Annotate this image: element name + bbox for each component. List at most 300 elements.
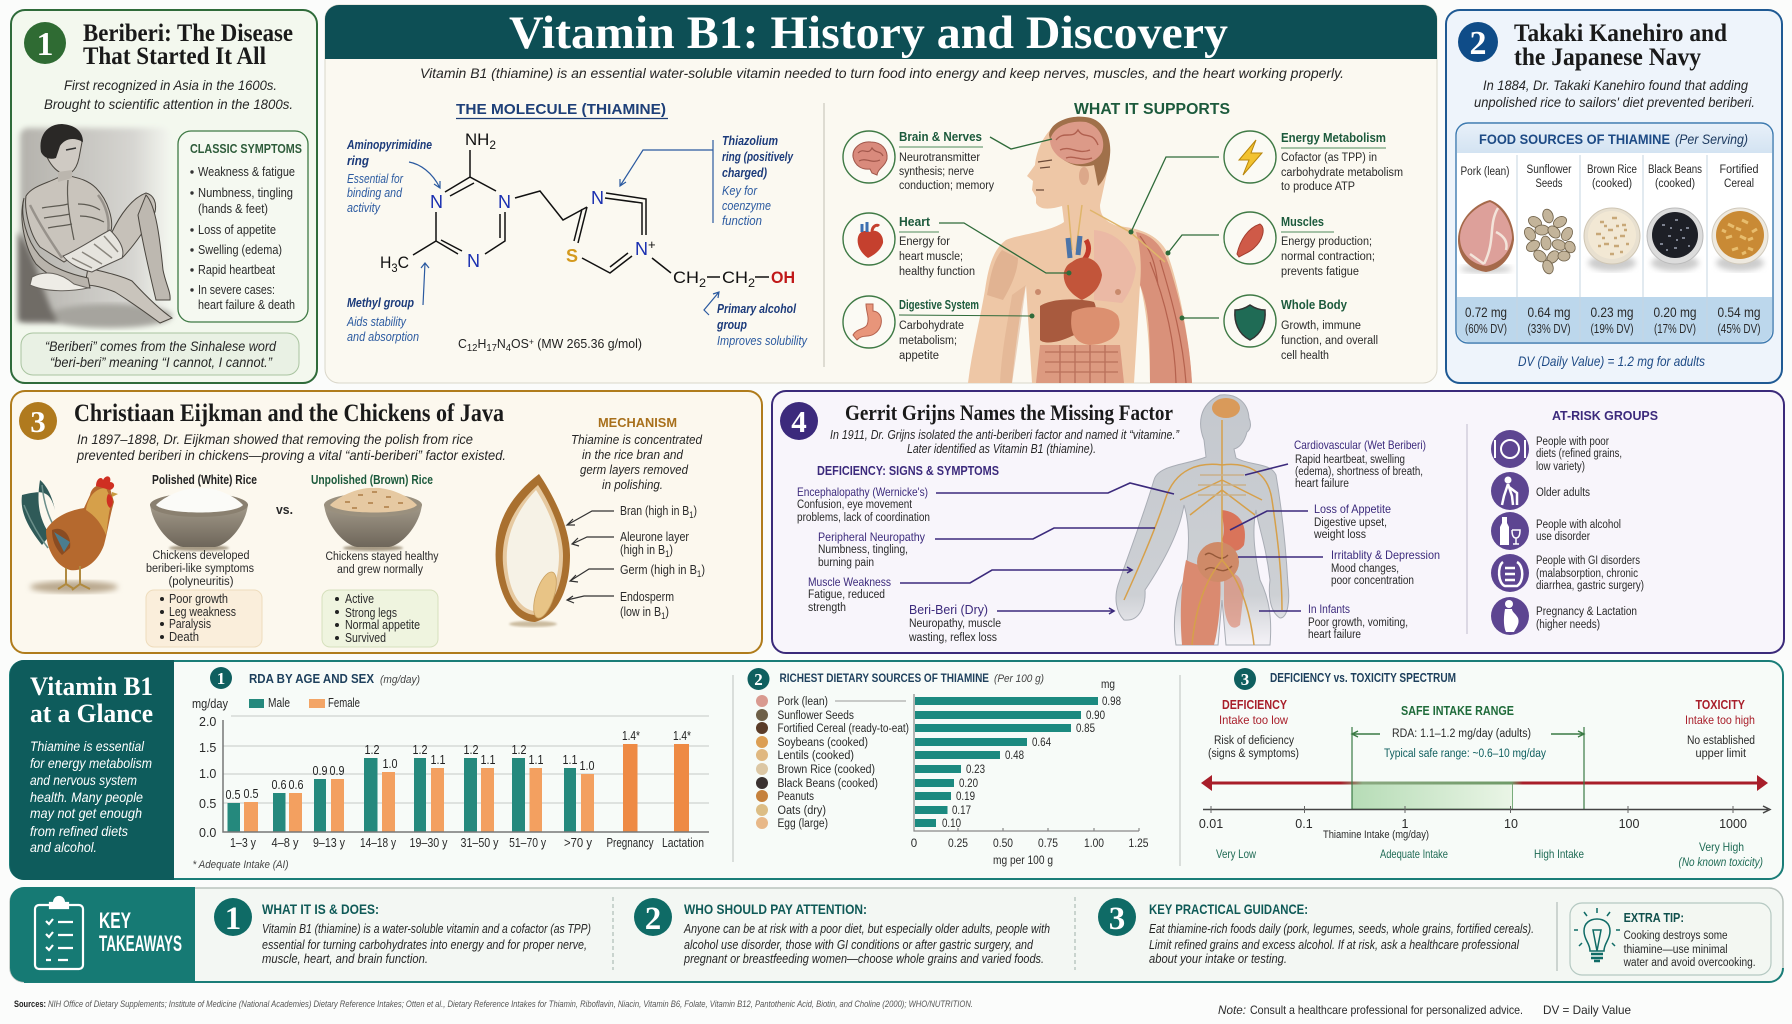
glance sidebar: may not get enough — [30, 805, 142, 821]
annotation: primary alcohol group: group — [716, 318, 747, 332]
footer note: DV = Daily Value — [1543, 1003, 1631, 1017]
number badge 3: 3 — [30, 404, 46, 439]
food sources table: FOOD SOURCES OF THIAMINE — [1479, 131, 1670, 147]
support: energy metabolism: carbohydrate metabolism — [1281, 167, 1403, 179]
chart: richest dietary sources: mg — [1101, 679, 1115, 691]
rice comparison: polished white rice: beriberi-like symptoms — [146, 563, 254, 575]
support: energy metabolism: Cofactor (as TPP) in — [1281, 152, 1377, 164]
icon: clipboard checklist — [35, 897, 83, 969]
at-risk: alcohol use disorder — [1491, 512, 1621, 550]
title banner — [325, 5, 1437, 59]
sources line: NIH Office of Dietary Supplements; Institute of Medicine (National Academies) Dietary Reference Intakes; Otten et al., Dietary Reference Intakes for Thiamin, Riboflavin, Niacin, Vitamin B6, Folate, Vitamin B12, Pantothenic Acid, Biotin, and Choline (2000); WHO/NUTRITION. — [48, 999, 973, 1010]
annotation: aminopyrimidine ring: Aminopyrimidine — [346, 138, 432, 152]
safe intake label: RDA: 1.1–1.2 mg/day (adults) — [1392, 728, 1531, 740]
classic symptoms box — [178, 131, 308, 322]
chart: rda by age and sex: 1.0 — [382, 756, 398, 771]
formula: 12 — [467, 343, 478, 354]
support: digestive system: Carbohydrate — [899, 320, 964, 332]
chart: rda by age and sex: 19–30 y — [410, 836, 448, 850]
symptom: wet beriberi: Cardiovascular (Wet Beriberi) — [1294, 438, 1426, 452]
chart: richest dietary sources: 0.19 — [956, 791, 975, 803]
chart: rda by age and sex: RDA BY AGE AND SEX — [249, 672, 375, 686]
chart: deficiency vs toxicity spectrum: 10 — [1504, 817, 1518, 831]
grain layer labels: Bran (high in B — [620, 504, 703, 518]
etymology callout: “Beriberi” comes from the Sinhalese word — [45, 339, 276, 354]
chart: rda by age and sex: 0.5 — [199, 797, 216, 811]
chart: deficiency vs toxicity spectrum: 100 — [1619, 817, 1639, 831]
takeaway 3 — [1098, 898, 1534, 966]
chart: rda by age and sex: 51–70 y — [509, 836, 547, 850]
chart: rda by age and sex: 1.1 — [430, 752, 446, 767]
at-risk: poor diets — [1491, 430, 1622, 473]
classic symptoms box: In severe cases: — [198, 283, 275, 297]
number badge 1: 1 — [36, 26, 54, 63]
symptom: wet beriberi: (edema), shortness of breath, — [1295, 466, 1423, 478]
at-risk: older adults: Older adults — [1536, 487, 1590, 499]
chemical structure: S — [566, 246, 578, 266]
at-risk: alcohol use disorder: People with alcohol — [1536, 519, 1621, 531]
rice comparison: unpolished brown rice: Chickens stayed healthy — [326, 551, 439, 563]
chart: rda by age and sex: (mg/day) — [380, 674, 420, 686]
chart: rda by age and sex: 1 — [217, 669, 225, 688]
chemical structure: N — [635, 239, 648, 259]
chart: richest dietary sources: (Per 100 g) — [994, 673, 1044, 685]
annotation: aminopyrimidine ring: ring — [347, 154, 369, 168]
chart: rda by age and sex: 1–3 y — [230, 836, 257, 850]
grain layer labels: 1 — [689, 510, 694, 520]
takeaway 2 — [634, 898, 1050, 966]
chemical structure: C — [398, 253, 409, 272]
support: heart: heart muscle; — [899, 251, 963, 263]
sources line: Sources: — [14, 999, 46, 1010]
symptom: dry beriberi: Neuropathy, muscle — [909, 618, 1001, 630]
chart: rda by age and sex: 1.4* — [673, 728, 691, 743]
rice comparison: unpolished brown rice: Unpolished (Brown) Rice — [311, 473, 433, 487]
food sources table: Sunflower — [1526, 164, 1572, 176]
what it supports heading: WHAT IT SUPPORTS — [1074, 101, 1230, 118]
food sources table: (Per Serving) — [1675, 131, 1748, 147]
symptom: irritability and depression — [1238, 548, 1440, 587]
takeaway 2: alcohol use disorder, those with GI conditions or after gastric surgery, and — [684, 938, 1034, 952]
symptom: irritability and depression: Irritablity & Depression — [1331, 548, 1440, 562]
symptom: muscle weakness: Fatigue, reduced — [808, 589, 885, 601]
chart: richest dietary sources: 0 — [911, 838, 917, 850]
heading: takaki: Takaki Kanehiro and — [1514, 20, 1727, 47]
food sources table: 0.23 mg — [1590, 304, 1634, 320]
support: muscles: Energy production; — [1281, 236, 1372, 248]
takeaway 2: pregnant or breastfeeding women—choose whole grains and varied foods. — [683, 952, 1044, 966]
illustration: human torso with organs — [968, 117, 1192, 383]
takeaway 1 — [214, 898, 591, 966]
chemical structure: 2 — [489, 138, 496, 152]
chart: rda by age and sex: 0.5 — [226, 787, 240, 802]
grain layer labels: ) — [669, 543, 673, 557]
classic symptoms box: Numbness, tingling — [198, 186, 293, 200]
toxicity label — [1685, 698, 1755, 760]
food sources table: (45% DV) — [1718, 322, 1760, 336]
annotation: aminopyrimidine ring: Essential for — [347, 172, 404, 186]
chart: deficiency vs toxicity spectrum: (No known toxicity) — [1678, 855, 1763, 869]
chemical structure: OH — [771, 268, 795, 287]
annotation: methyl group: and absorption — [347, 330, 419, 344]
rice comparison: unpolished brown rice: Survived — [345, 631, 386, 645]
formula: H — [477, 336, 486, 351]
grain layer labels: 1 — [665, 549, 669, 559]
classic symptoms box: Weakness & fatigue — [198, 165, 295, 179]
at-risk: gi disorders: (malabsorption, chronic — [1536, 568, 1638, 580]
panel 3: eijkman — [11, 391, 762, 653]
takeaway 2: WHO SHOULD PAY ATTENTION: — [684, 901, 867, 917]
food sources table: (33% DV) — [1528, 322, 1570, 336]
deficiency heading: DEFICIENCY: SIGNS & SYMPTOMS — [817, 463, 999, 478]
toxicity label: upper limit — [1696, 748, 1747, 760]
annotation: thiazolium ring — [620, 134, 794, 228]
symptom: muscle weakness: Muscle Weakness — [808, 575, 891, 589]
annotation: thiazolium ring: Thiazolium — [722, 134, 778, 148]
heading: grijns: Gerrit Grijns Names the Missing Factor — [845, 400, 1173, 425]
annotation: thiazolium ring: Key for — [722, 184, 758, 198]
intro text: prevented beriberi in chickens—proving a vital “anti-beriberi” factor existed. — [76, 447, 506, 463]
number badge 3 — [19, 402, 57, 440]
safe intake label — [1352, 704, 1584, 760]
deficiency label: DEFICIENCY — [1222, 698, 1288, 712]
support: whole body: Growth, immune — [1281, 320, 1361, 332]
panel 4: grijns — [772, 391, 1784, 653]
chart: rda by age and sex: 0.0 — [199, 826, 216, 840]
food sources table: (17% DV) — [1654, 322, 1696, 336]
annotation: thiazolium ring: ring (positively — [722, 150, 794, 164]
support: whole body: Whole Body — [1281, 297, 1348, 312]
footer note: Note: — [1218, 1003, 1246, 1017]
symptom: dry beriberi: wasting, reflex loss — [908, 632, 997, 644]
chart: richest dietary sources: 2 — [754, 670, 763, 689]
annotation: aminopyrimidine ring — [346, 138, 440, 215]
heading: beriberi: That Started It All — [83, 43, 266, 70]
vs label: vs. — [276, 502, 293, 517]
panel: header and molecule — [325, 5, 1437, 383]
chart: richest dietary sources: Fortified Cereal (ready-to-eat) — [778, 723, 909, 735]
annotation: aminopyrimidine ring: binding and — [347, 186, 403, 200]
chart: richest dietary sources: 0.64 — [1032, 737, 1052, 749]
takeaway 1: essential for turning carbohydrates into energy and for proper nerve, — [262, 938, 587, 952]
title banner: Vitamin B1: History and Discovery — [509, 7, 1229, 59]
symptom: in infants: In Infants — [1308, 602, 1350, 616]
intro text — [830, 428, 1180, 456]
number badge 1 — [24, 22, 66, 64]
glance sidebar: Vitamin B1 — [30, 672, 153, 701]
chemical structure: CH — [722, 268, 747, 287]
food sources table: 0.54 mg — [1718, 304, 1760, 320]
takeaway 1: Vitamin B1 (thiamine) is a water-soluble vitamin and a cofactor (as TPP) — [262, 922, 591, 936]
symptom: encephalopathy: problems, lack of coordination — [797, 512, 930, 524]
toxicity label: Intake too high — [1685, 713, 1755, 727]
rice comparison: polished white rice: Poor growth — [169, 592, 228, 606]
mechanism text: in the rice bran and — [582, 447, 684, 462]
chart: richest dietary sources: 0.98 — [1102, 696, 1121, 708]
number badge 4: 4 — [791, 404, 807, 439]
support: brain and nerves: conduction; memory — [899, 180, 994, 192]
illustration: emaciated man with beriberi — [18, 124, 172, 328]
heading: beriberi — [83, 20, 293, 70]
icon: bowl of white rice — [150, 488, 248, 551]
chart: deficiency vs toxicity spectrum: DEFICIENCY vs. TOXICITY SPECTRUM — [1270, 671, 1456, 685]
food sources table: (60% DV) — [1465, 322, 1507, 336]
chart: rda by age and sex: mg/day — [192, 697, 229, 711]
food: brown rice bowl — [1584, 208, 1640, 271]
grain layer labels — [567, 504, 705, 621]
support: heart: healthy function — [899, 266, 975, 278]
chart: richest dietary sources: Pork (lean) — [778, 696, 828, 708]
classic symptoms box: (hands & feet) — [198, 202, 268, 216]
support: digestive system: metabolism; — [899, 335, 957, 347]
symptom: dry beriberi — [908, 603, 1114, 644]
symptom: in infants — [1259, 602, 1408, 641]
symptom: peripheral neuropathy: Peripheral Neuropathy — [818, 530, 925, 544]
subtitle: Vitamin B1 (thiamine) is an essential water-soluble vitamin needed to turn food into energy and keep nerves, muscles, and the heart working properly. — [420, 65, 1344, 81]
chart: rda by age and sex: Male — [268, 696, 290, 710]
takeaway 1: WHAT IT IS & DOES: — [262, 901, 379, 917]
rice comparison: polished white rice: (polyneuritis) — [168, 576, 234, 588]
takeaway 3: 3 — [1109, 901, 1125, 937]
takeaway 1: muscle, heart, and brain function. — [262, 952, 428, 966]
chart: rda by age and sex: 4–8 y — [272, 836, 299, 850]
support: whole body: function, and overall — [1281, 335, 1378, 347]
support: energy metabolism — [1128, 130, 1403, 234]
food sources table: 0.64 mg — [1528, 304, 1570, 320]
chart: rda by age and sex: 0.9 — [312, 763, 328, 778]
chemical structure: CH — [673, 268, 698, 287]
deficiency label — [1208, 698, 1299, 760]
takeaway 3: Limit refined grains and excess alcohol. If at risk, ask a healthcare professional — [1149, 938, 1520, 952]
footer note: Consult a healthcare professional for personalized advice. — [1250, 1003, 1523, 1017]
chart: richest dietary sources: Peanuts — [778, 791, 814, 803]
chart: rda by age and sex: 1.1 — [562, 752, 578, 767]
symptom: encephalopathy: Confusion, eye movement — [797, 499, 913, 511]
symptom: peripheral neuropathy: Numbness, tingling, — [818, 544, 908, 556]
chart: deficiency vs toxicity spectrum: Thiamine Intake (mg/day) — [1323, 829, 1429, 841]
chemical structure: 3 — [391, 261, 398, 275]
toxicity label: TOXICITY — [1696, 698, 1746, 712]
at-risk heading: AT-RISK GROUPS — [1552, 408, 1658, 423]
at-risk: pregnancy and lactation — [1491, 597, 1637, 635]
chart: richest dietary sources: 0.48 — [1005, 750, 1024, 762]
chart: richest dietary sources: Black Beans (cooked) — [778, 778, 878, 790]
at-risk: older adults — [1491, 472, 1590, 510]
intro text — [1474, 77, 1755, 110]
takeaway 3: about your intake or testing. — [1149, 952, 1287, 966]
food sources table: (cooked) — [1655, 178, 1695, 190]
support: brain and nerves: Neurotransmitter — [899, 152, 980, 164]
chart: rda by age and sex: 0.6 — [272, 777, 286, 792]
food sources table: 0.20 mg — [1654, 304, 1696, 320]
formula: 17 — [486, 343, 497, 354]
rice comparison: unpolished brown rice: Active — [345, 592, 374, 606]
deficiency label: Intake too low — [1219, 713, 1288, 727]
formula: C — [458, 336, 467, 351]
food sources table: Pork (lean) — [1460, 166, 1510, 178]
chart: rda by age and sex: 1.1 — [528, 752, 544, 767]
toxicity label: No established — [1687, 735, 1755, 747]
icon: bowl of brown rice — [324, 488, 422, 551]
chemical structure: N — [467, 251, 480, 271]
glance sidebar — [10, 660, 174, 880]
chart: richest dietary sources: RICHEST DIETARY SOURCES OF THIAMINE — [780, 671, 989, 685]
annotation: primary alcohol group — [704, 292, 808, 348]
chemical structure: NH — [465, 130, 490, 149]
food sources table: Black Beans — [1648, 164, 1702, 176]
formula: N — [497, 336, 506, 351]
takeaways sidebar with clipboard icon: TAKEAWAYS — [99, 931, 182, 956]
grain layer labels: ) — [665, 605, 669, 619]
chart: rda by age and sex: 1.5 — [199, 741, 216, 755]
mechanism text: in polishing. — [602, 477, 663, 492]
panel 6: key takeaways — [10, 887, 1783, 982]
glance sidebar: health. Many people — [30, 789, 143, 805]
grain layer labels: (low in B — [620, 605, 668, 619]
chart: rda by age and sex: Pregnancy — [606, 836, 654, 850]
support: whole body — [1180, 295, 1378, 362]
chart: rda by age and sex: Female — [328, 696, 360, 710]
glance sidebar: for energy metabolism — [30, 755, 152, 771]
intro text: First recognized in Asia in the 1600s. — [64, 77, 277, 93]
chart: richest dietary sources: Soybeans (cooked) — [778, 737, 868, 749]
chart: richest dietary sources: 1.00 — [1084, 838, 1104, 850]
chart: richest dietary sources: 0.20 — [959, 778, 978, 790]
intro text: In 1897–1898, Dr. Eijkman showed that removing the polish from rice — [77, 431, 473, 447]
symptom: wet beriberi: heart failure — [1295, 478, 1349, 490]
mechanism text — [571, 415, 703, 492]
symptom: loss of appetite: Loss of Appetite — [1314, 502, 1391, 516]
chart: richest dietary sources: 0.23 — [966, 764, 985, 776]
food sources table: (cooked) — [1592, 178, 1632, 190]
chart: deficiency vs toxicity spectrum: Adequate Intake — [1380, 847, 1448, 861]
chart: richest dietary sources: 0.17 — [952, 805, 971, 817]
heading: takaki: the Japanese Navy — [1514, 44, 1701, 71]
food sources table: Fortified — [1720, 164, 1758, 176]
food sources table: Brown Rice — [1587, 164, 1637, 176]
formula: (MW 265.36 g/mol) — [534, 336, 642, 351]
at-risk: poor diets: low variety) — [1536, 461, 1585, 473]
chart: deficiency vs toxicity spectrum: 1000 — [1719, 817, 1747, 831]
grain layer labels: Germ (high in B — [620, 563, 708, 577]
symptom: wet beriberi — [1245, 438, 1426, 490]
chart: rda by age and sex: 1.1 — [480, 752, 496, 767]
formula: OS — [511, 336, 529, 351]
classic symptoms box: CLASSIC SYMPTOMS — [190, 141, 302, 156]
support: heart: Heart — [899, 214, 931, 229]
rice comparison: unpolished brown rice: Strong legs — [345, 606, 397, 620]
rice comparison: polished white rice: Chickens developed — [152, 550, 250, 562]
heading: eijkman: Christiaan Eijkman and the Chickens of Java — [74, 400, 504, 427]
glance sidebar: and nervous system — [30, 772, 137, 788]
support: energy metabolism: Energy Metabolism — [1281, 130, 1386, 145]
support: brain and nerves — [843, 129, 1052, 192]
extra tip box — [1570, 903, 1771, 975]
chart: rda by age and sex: 9–13 y — [313, 836, 346, 850]
symptom: muscle weakness: strength — [808, 602, 846, 614]
symptom: peripheral neuropathy: burning pain — [818, 557, 874, 569]
annotation: thiazolium ring: coenzyme — [722, 199, 771, 213]
chart: deficiency vs toxicity spectrum: 0.01 — [1199, 817, 1223, 831]
etymology callout: “beri-beri” meaning “I cannot, I cannot.” — [50, 355, 272, 370]
grain layer labels: ) — [694, 504, 697, 518]
chart: richest dietary sources: Brown Rice (cooked) — [778, 764, 875, 776]
chart: deficiency vs toxicity spectrum: Very Low — [1216, 847, 1256, 861]
chart: rda by age and sex: 0.5 — [244, 786, 258, 801]
chart: richest dietary sources: Lentils (cooked) — [778, 750, 854, 762]
support: muscles: prevents fatigue — [1281, 266, 1359, 278]
rice comparison: unpolished brown rice: Normal appetite — [345, 618, 420, 632]
glance sidebar: at a Glance — [30, 699, 153, 728]
takeaway 3: KEY PRACTICAL GUIDANCE: — [1149, 901, 1308, 917]
formula: 4 — [506, 343, 511, 354]
intro text: unpolished rice to sailors' diet prevented beriberi. — [1474, 94, 1755, 110]
chemical structure: 2 — [699, 276, 706, 290]
illustration: full body nervous system — [1116, 395, 1289, 645]
annotation: primary alcohol group: Primary alcohol — [717, 302, 796, 316]
chart: rda by age and sex: 1.2 — [464, 742, 478, 757]
rice comparison: polished white rice: Death — [169, 630, 199, 644]
food sources table: 0.72 mg — [1465, 304, 1507, 320]
number badge 2 — [1458, 22, 1498, 62]
chart: rda by age and sex — [192, 667, 709, 871]
intro text: In 1911, Dr. Grijns isolated the anti-beriberi factor and named it “vitamine.” — [830, 428, 1180, 442]
support: brain and nerves: Brain & Nerves — [899, 129, 982, 144]
glance sidebar: and alcohol. — [30, 839, 97, 855]
support: heart: Energy for — [899, 236, 950, 248]
extra tip box: EXTRA TIP: — [1624, 910, 1684, 925]
extra tip box: Cooking destroys some — [1624, 930, 1728, 942]
rice comparison: polished white rice — [146, 473, 262, 647]
rice comparison: polished white rice: Leg weakness — [169, 605, 236, 619]
formula: + — [529, 337, 534, 347]
symptom: loss of appetite: Digestive upset, — [1314, 517, 1387, 529]
number badge 2: 2 — [1470, 25, 1486, 62]
symptom: encephalopathy: Encephalopathy (Wernicke's) — [797, 485, 928, 499]
symptom: in infants: Poor growth, vomiting, — [1308, 617, 1408, 629]
chart: richest dietary sources: 0.25 — [948, 838, 968, 850]
at-risk: pregnancy and lactation: Pregnancy & Lactation — [1536, 606, 1637, 618]
chart: rda by age and sex: Lactation — [662, 836, 704, 850]
food: pork — [1458, 200, 1514, 273]
chart: deficiency vs toxicity spectrum — [1199, 668, 1770, 869]
symptom: irritability and depression: Mood changes, — [1331, 563, 1399, 575]
daily value note: DV (Daily Value) = 1.2 mg for adults — [1518, 353, 1705, 369]
food: fortified cereal bowl — [1712, 208, 1768, 271]
spectrum graphic — [1201, 727, 1770, 813]
glance sidebar: Thiamine is essential — [30, 738, 145, 754]
classic symptoms box: Rapid heartbeat — [198, 263, 275, 277]
chart: richest dietary sources — [748, 668, 1148, 867]
chemical structure: N — [591, 188, 604, 208]
chart: deficiency vs toxicity spectrum: High Intake — [1534, 847, 1584, 861]
food sources table — [1456, 123, 1773, 343]
takeaway 3: Eat thiamine-rich foods daily (pork, legumes, seeds, whole grains, fortified cereals). — [1149, 922, 1534, 936]
chart: rda by age and sex: 1.2 — [512, 742, 526, 757]
annotation: primary alcohol group: Improves solubility — [717, 334, 808, 348]
extra tip box: thiamine—use minimal — [1624, 944, 1728, 956]
at-risk: gi disorders — [1491, 554, 1644, 592]
safe intake label: Typical safe range: ~0.6–10 mg/day — [1384, 748, 1546, 760]
deficiency label: Risk of deficiency — [1214, 735, 1294, 747]
chemical structure: N — [430, 192, 443, 212]
support: heart — [843, 213, 1072, 278]
food sources table: (19% DV) — [1590, 322, 1634, 336]
food: black beans bowl — [1647, 208, 1703, 271]
chart: rda by age and sex: >70 y — [564, 836, 593, 850]
symptom: in infants: heart failure — [1308, 629, 1361, 641]
rice comparison: polished white rice: Paralysis — [169, 617, 211, 631]
